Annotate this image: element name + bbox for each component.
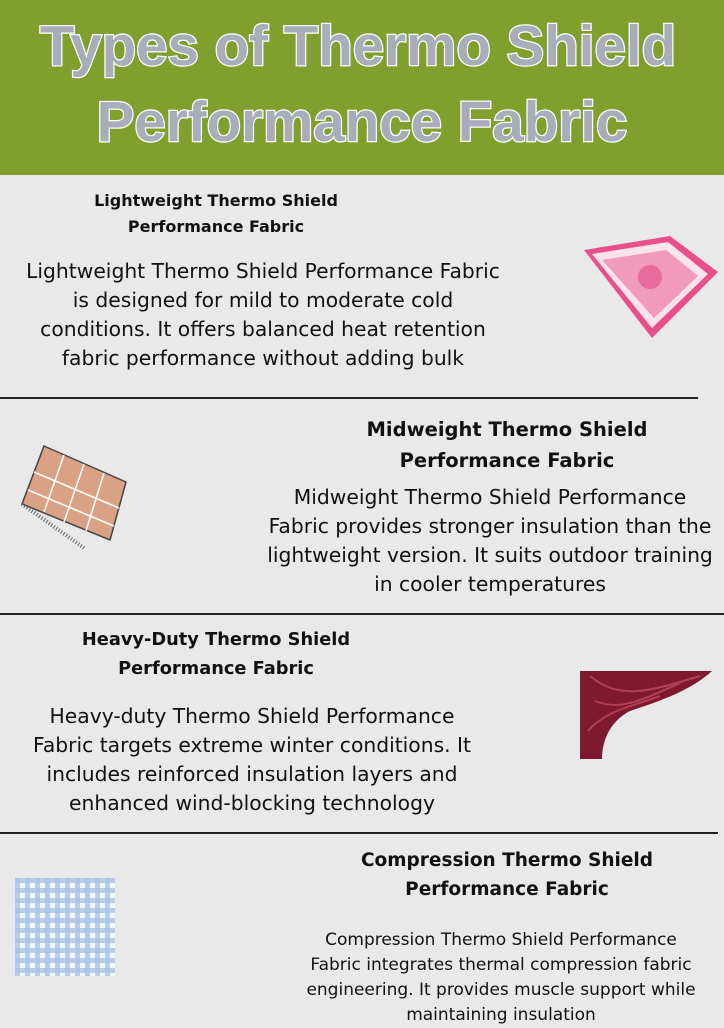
text: midweight: lightweight version. It suits outdoor training bbox=[267, 543, 713, 567]
title: Types of Thermo Shield bbox=[40, 14, 676, 77]
icon: red curtain bbox=[580, 671, 712, 759]
text: midweight bbox=[267, 485, 713, 596]
heading: compression: Performance Fabric bbox=[405, 879, 609, 900]
heading: compression: Compression Thermo Shield bbox=[361, 850, 653, 871]
text: compression: Fabric integrates thermal compression fabric bbox=[310, 955, 692, 975]
heading: midweight: Midweight Thermo Shield bbox=[367, 418, 647, 441]
heading: heavy-duty: Heavy-Duty Thermo Shield bbox=[82, 629, 350, 650]
text: lightweight: fabric performance without adding bulk bbox=[62, 346, 464, 370]
text: lightweight: is designed for mild to moderate cold bbox=[73, 288, 453, 312]
text: compression bbox=[306, 930, 696, 1025]
text: midweight: Midweight Thermo Shield Performance bbox=[294, 485, 686, 509]
text: lightweight bbox=[26, 259, 500, 370]
icon: pink scarf bbox=[584, 236, 718, 338]
heading: midweight: Performance Fabric bbox=[400, 449, 614, 472]
text: heavy-duty: includes reinforced insulation layers and bbox=[46, 762, 458, 786]
text: heavy-duty: Heavy-duty Thermo Shield Performance bbox=[50, 704, 454, 728]
text: lightweight: Lightweight Thermo Shield Performance Fabric bbox=[26, 259, 500, 283]
title bbox=[39, 14, 676, 153]
text: heavy-duty: Fabric targets extreme winter conditions. It bbox=[33, 733, 471, 757]
heading: lightweight: Performance Fabric bbox=[128, 217, 304, 236]
heading: lightweight: Lightweight Thermo Shield bbox=[94, 191, 338, 210]
icon: plaid blanket bbox=[20, 445, 127, 550]
text: lightweight: conditions. It offers balanced heat retention bbox=[40, 317, 486, 341]
heading: midweight bbox=[367, 418, 647, 472]
heading: heavy-duty bbox=[82, 629, 350, 679]
heading: compression bbox=[361, 850, 653, 900]
heading: lightweight bbox=[94, 191, 338, 236]
text: heavy-duty bbox=[33, 704, 471, 815]
text: midweight: Fabric provides stronger insulation than the bbox=[269, 514, 711, 538]
heading: heavy-duty: Performance Fabric bbox=[118, 658, 314, 679]
title banner bbox=[0, 0, 724, 175]
icon: gingham fabric bbox=[15, 878, 115, 976]
text: heavy-duty: enhanced wind-blocking technology bbox=[69, 791, 435, 815]
text: compression: Compression Thermo Shield Performance bbox=[325, 930, 677, 950]
text: compression: engineering. It provides muscle support while bbox=[306, 980, 696, 1000]
title: Performance Fabric bbox=[97, 90, 627, 153]
text: midweight: in cooler temperatures bbox=[374, 572, 606, 596]
text: compression: maintaining insulation bbox=[406, 1005, 596, 1025]
